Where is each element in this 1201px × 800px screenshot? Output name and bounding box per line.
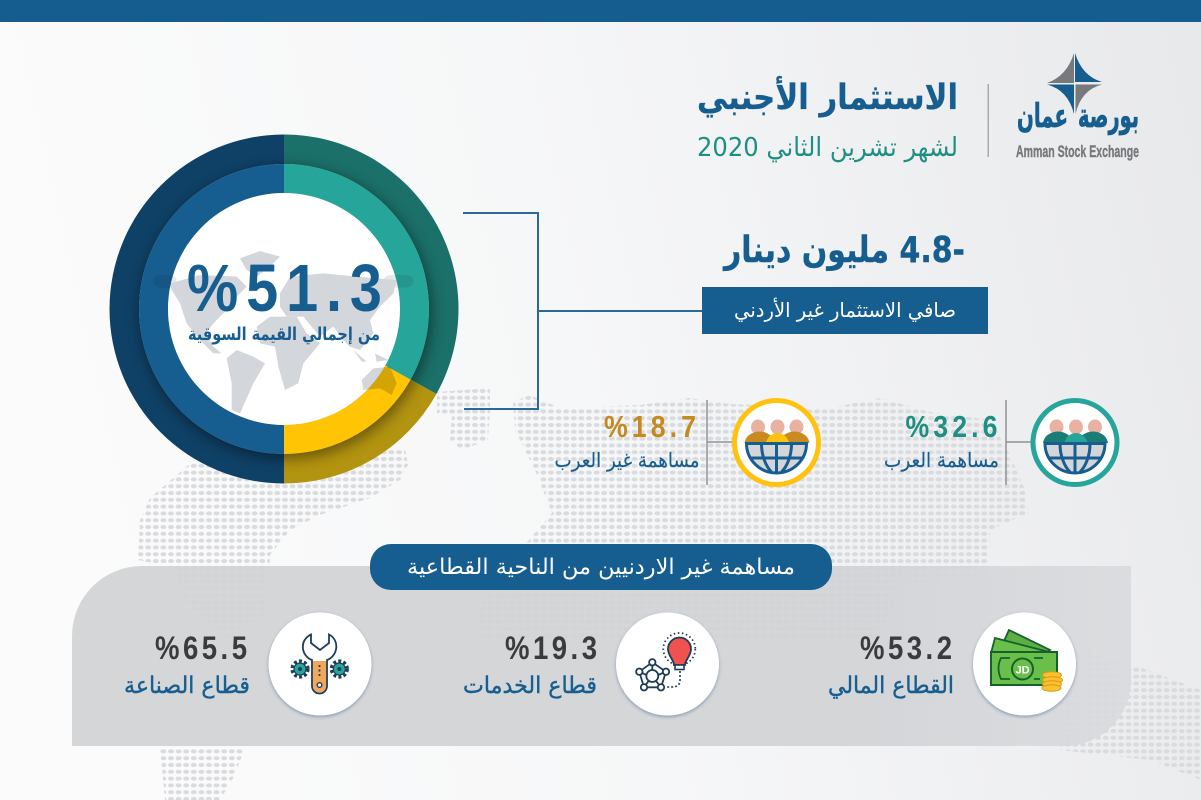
connector xyxy=(707,400,733,485)
icon: wrench and gears xyxy=(268,612,372,716)
outer ring: teal xyxy=(284,134,459,394)
sector: finance: %53.2 xyxy=(860,631,952,667)
middle ring: blue xyxy=(139,164,284,454)
logo divider xyxy=(988,84,989,157)
icon: banknotes and coins xyxy=(973,612,1076,716)
subtitle: لشهر تشرين الثاني 2020 xyxy=(697,133,958,163)
donut value: %51.3 xyxy=(187,251,382,326)
stat: Arabs contribution: مساهمة العرب xyxy=(884,448,999,472)
icon: light bulb and network xyxy=(616,612,719,716)
logo wordmark xyxy=(1017,96,1139,136)
sector: services: %19.3 xyxy=(505,631,597,667)
sector: services: قطاع الخدمات xyxy=(463,673,597,699)
icon: people on globe, teal xyxy=(1033,400,1117,484)
logo wordmark: عمان xyxy=(1017,96,1068,135)
bracket connector xyxy=(463,213,702,409)
net investment label box xyxy=(702,287,988,334)
sector: industry xyxy=(124,612,372,716)
stat: Arabs contribution: %32.6 xyxy=(905,410,998,445)
sector: finance xyxy=(828,612,1076,716)
sector: services xyxy=(463,612,719,716)
net investment amount: -4.8 مليون دينار xyxy=(722,230,965,271)
sector heading pill: مساهمة غير الاردنيين من الناحية القطاعية xyxy=(407,555,795,580)
title: الاستثمار الأجنبي xyxy=(697,75,958,118)
stat: Arabs contribution xyxy=(884,400,1117,485)
net investment label box: صافي الاستثمار غير الأردني xyxy=(734,298,956,323)
donut caption: من إجمالي القيمة السوقية xyxy=(188,324,380,345)
middle ring: teal xyxy=(284,164,429,380)
icon: people on globe, yellow xyxy=(734,400,818,484)
middle ring: yellow xyxy=(284,366,411,454)
world map xyxy=(153,251,413,413)
logo wordmark: بورصة xyxy=(1078,96,1139,136)
center disc xyxy=(168,193,400,425)
sector heading pill xyxy=(370,544,832,590)
icon: banknotes and coins: JD xyxy=(1015,664,1030,676)
donut chart xyxy=(110,134,459,484)
top bar xyxy=(0,0,1201,22)
icon: four-point star xyxy=(1047,53,1102,114)
outer ring: gold xyxy=(284,380,436,484)
connector xyxy=(1006,400,1031,485)
panel: sector contribution xyxy=(72,544,1131,746)
sector: finance: القطاع المالي xyxy=(828,673,954,699)
stat: non-Arabs contribution xyxy=(554,400,818,485)
stat: non-Arabs contribution: %18.7 xyxy=(604,410,696,445)
outer ring: navy xyxy=(110,134,284,484)
sector: industry: %65.5 xyxy=(155,631,247,667)
sector: industry: قطاع الصناعة xyxy=(124,673,250,699)
stat: non-Arabs contribution: مساهمة غير العرب xyxy=(554,448,700,472)
logo: Amman Stock Exchange xyxy=(1016,53,1139,161)
